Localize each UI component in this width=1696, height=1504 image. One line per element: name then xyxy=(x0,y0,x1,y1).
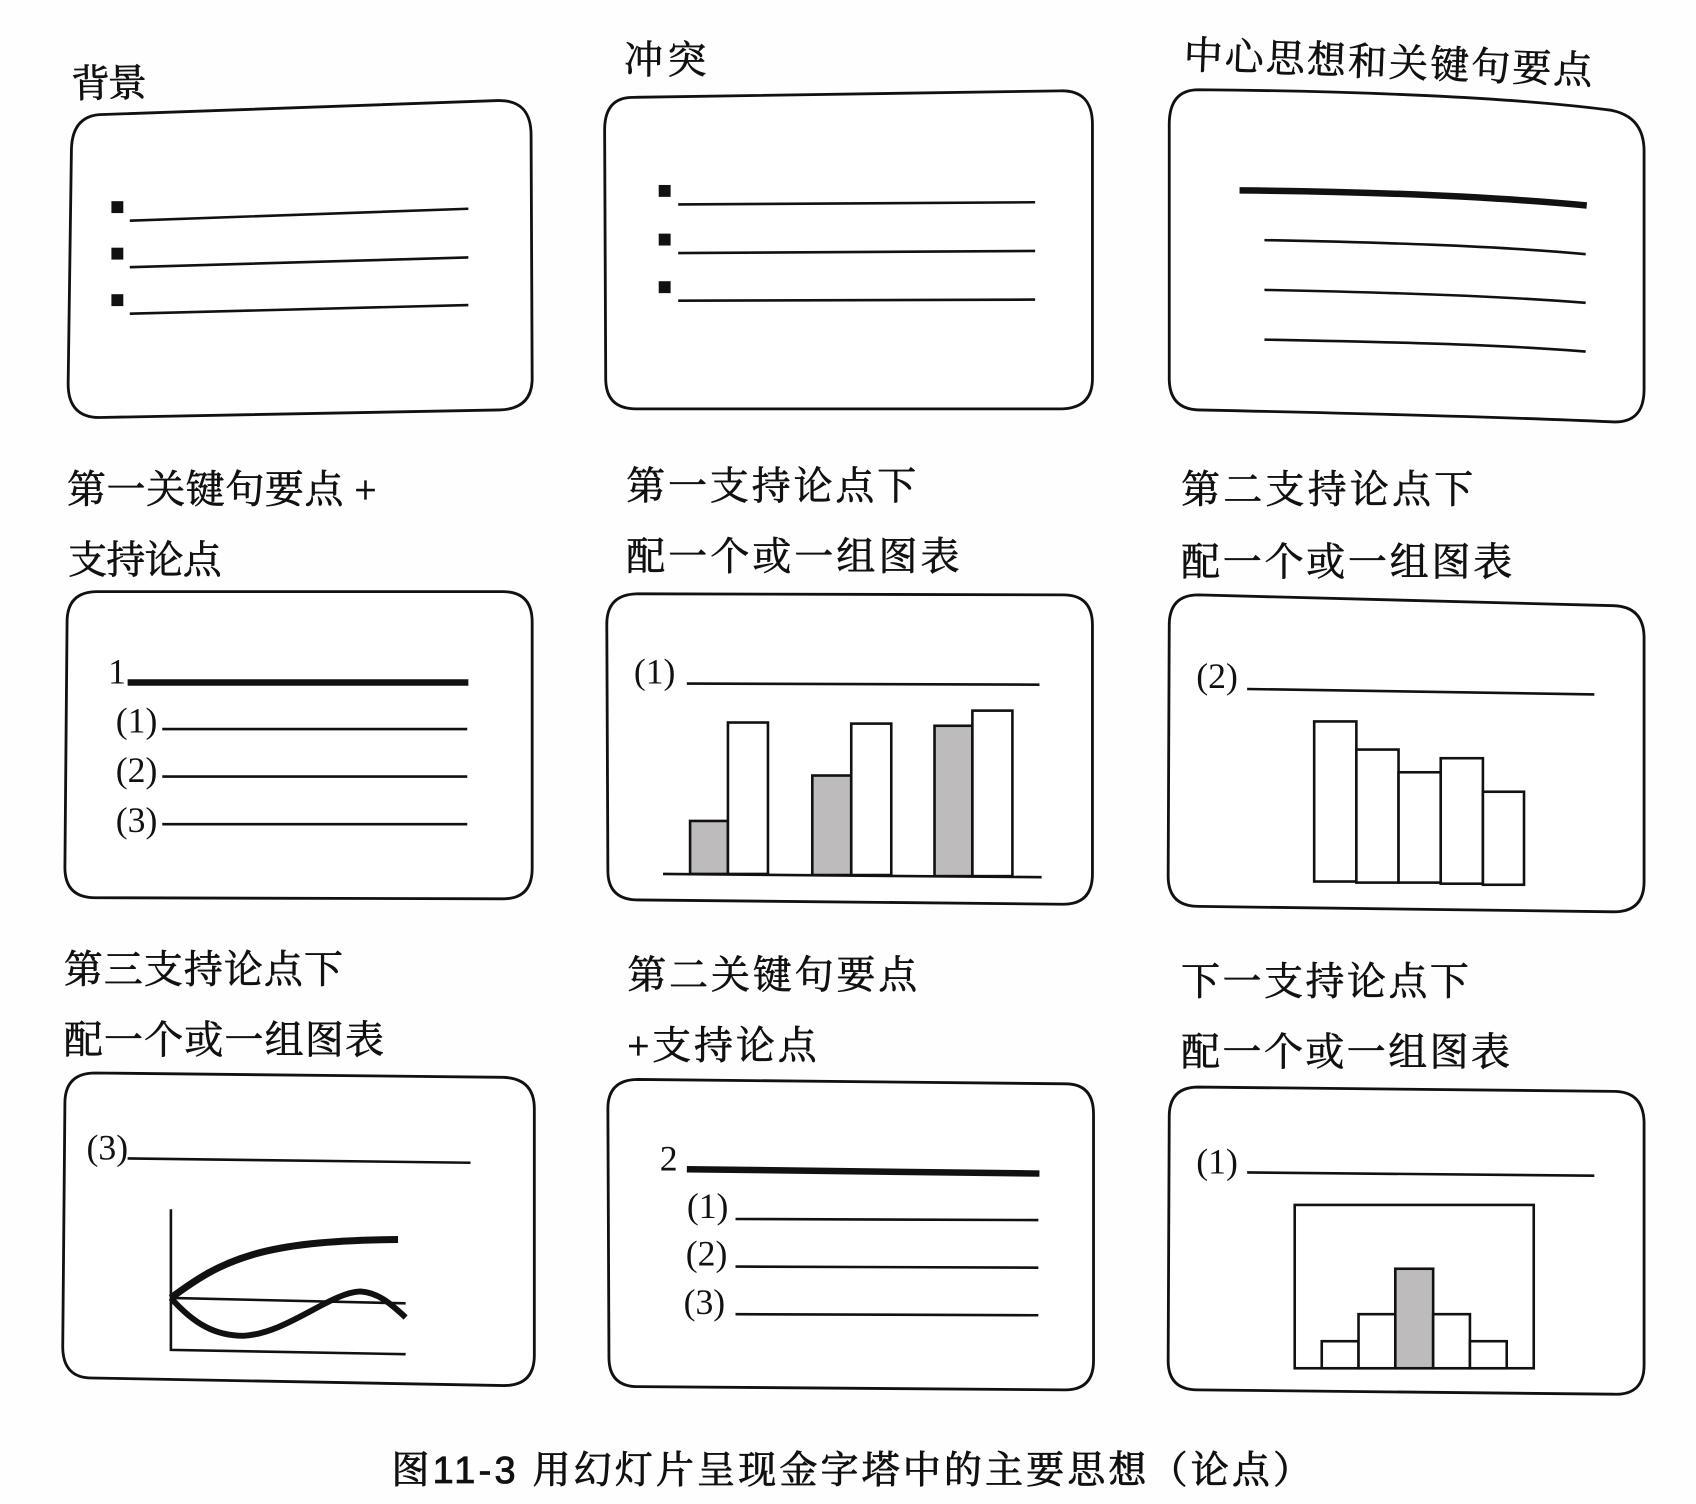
heading: 第一支持论点下 配一个或一组图表: 第一支持论点下 xyxy=(626,466,916,509)
heading: 第一支持论点下 配一个或一组图表 xyxy=(626,466,959,579)
heading: 第一关键句要点 + 支持论点: 支持论点 xyxy=(68,539,223,582)
numbered list: (2) xyxy=(686,1234,727,1274)
panel: first key line slide frame xyxy=(65,592,532,899)
heading: 第一支持论点下 配一个或一组图表: 配一个或一组图表 xyxy=(626,536,959,579)
heading: 下一支持论点下 配一个或一组图表 xyxy=(1181,961,1510,1074)
slide 6: second support chart xyxy=(1168,469,1644,912)
numbered list xyxy=(108,652,468,840)
slide 4: first key line and support xyxy=(65,469,532,899)
panel: main idea slide frame xyxy=(1169,90,1644,422)
slide 8: second key line and support xyxy=(608,955,1094,1390)
panel: third support slide frame xyxy=(63,1073,534,1386)
slide 9: next support chart xyxy=(1168,961,1644,1394)
bar chart xyxy=(1314,721,1524,885)
slide 7: third support chart: (3) xyxy=(87,1128,128,1168)
numbered list: 2 xyxy=(660,1138,678,1178)
slide 6: second support chart: (2) xyxy=(1196,656,1238,696)
numbered list: (2) xyxy=(116,750,157,790)
grouped bar chart xyxy=(663,711,1042,877)
heading: 第二关键句要点 +支持论点 xyxy=(627,955,918,1068)
heading: 中心思想和关键句要点: 中心思想和关键句要点 xyxy=(1183,34,1594,93)
heading: 第三支持论点下 配一个或一组图表: 配一个或一组图表 xyxy=(64,1020,384,1063)
slide 2: conflict xyxy=(605,40,1092,409)
histogram chart in frame xyxy=(1295,1205,1534,1368)
slide 3: main idea and key lines xyxy=(1169,34,1644,422)
panel: second support slide frame xyxy=(1168,595,1644,912)
panel: background slide frame xyxy=(68,101,532,418)
panel: second key line slide frame xyxy=(608,1079,1094,1390)
heading: 下一支持论点下 配一个或一组图表: 配一个或一组图表 xyxy=(1181,1031,1510,1074)
heading: 第二关键句要点 +支持论点: 第二关键句要点 xyxy=(627,955,918,998)
text lines xyxy=(1240,190,1587,352)
numbered list: (3) xyxy=(116,800,157,840)
heading: 第二支持论点下 配一个或一组图表: 第二支持论点下 xyxy=(1181,469,1473,512)
heading: 背景: 背景 xyxy=(71,62,147,106)
numbered list: (1) xyxy=(687,1186,728,1226)
panel: conflict slide frame xyxy=(605,91,1092,409)
slide 5: first support chart: (1) xyxy=(634,652,675,692)
numbered list: (1) xyxy=(116,700,157,740)
numbered list: 1 xyxy=(108,652,126,692)
numbered list: (3) xyxy=(684,1282,725,1322)
line chart xyxy=(171,1209,406,1354)
panel: next support slide frame xyxy=(1168,1087,1644,1394)
bullet list xyxy=(111,201,468,314)
heading: 第二关键句要点 +支持论点: +支持论点 xyxy=(627,1025,818,1068)
slide 9: next support chart: (1) xyxy=(1196,1142,1238,1182)
heading: 第三支持论点下 配一个或一组图表: 第三支持论点下 xyxy=(64,949,343,992)
heading: 第一关键句要点 + 支持论点: 第一关键句要点 + xyxy=(67,469,376,512)
heading: 第一关键句要点 + 支持论点 xyxy=(67,469,376,582)
slide 5: first support chart xyxy=(607,466,1092,904)
heading: 第二支持论点下 配一个或一组图表: 配一个或一组图表 xyxy=(1181,541,1512,584)
slide 1: background xyxy=(68,62,532,418)
caption: 图11-3 用幻灯片呈现金字塔中的主要思想（论点） xyxy=(392,1450,1311,1492)
panel: first support slide frame xyxy=(607,594,1092,904)
heading: 冲突: 冲突 xyxy=(624,40,706,83)
heading: 第三支持论点下 配一个或一组图表 xyxy=(64,949,384,1063)
heading: 下一支持论点下 配一个或一组图表: 下一支持论点下 xyxy=(1181,961,1469,1004)
slide 7: third support chart xyxy=(63,949,534,1386)
bullet list xyxy=(659,185,1035,301)
heading: 第二支持论点下 配一个或一组图表 xyxy=(1181,469,1512,584)
numbered list xyxy=(660,1138,1039,1322)
